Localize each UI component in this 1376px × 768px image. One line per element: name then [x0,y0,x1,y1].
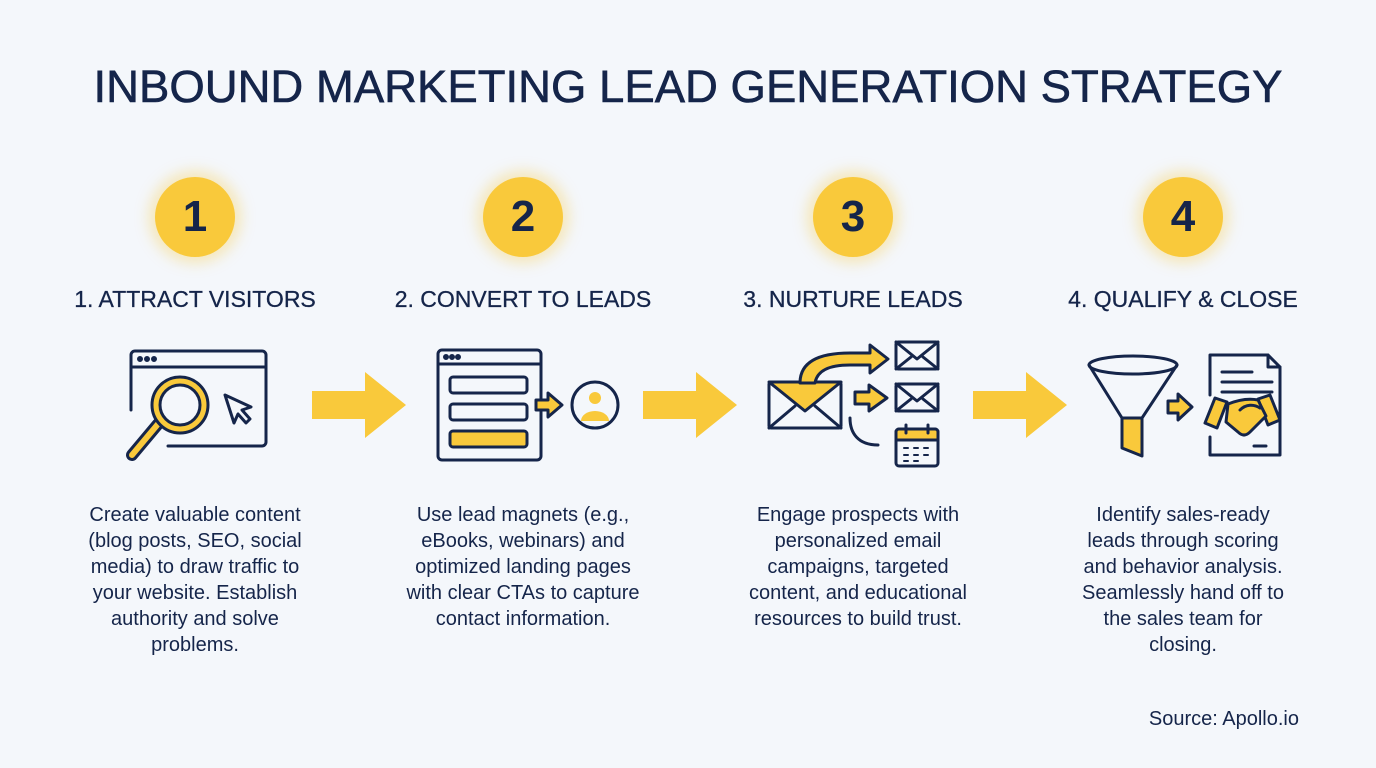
icon: browser search [131,351,266,455]
step 2 badge: 2 [511,192,535,241]
step 4 badge [1143,177,1223,257]
description 1: media) to draw traffic to [91,556,299,578]
arrow 2 [643,372,737,438]
description 2: with clear CTAs to capture [406,582,640,604]
heading 4: 4. QUALIFY & CLOSE [1068,286,1298,312]
description 1: Create valuable content [89,504,301,526]
description 1: problems. [151,634,239,656]
description 4: closing. [1149,634,1217,656]
description 2: eBooks, webinars) and [421,530,625,552]
description 4: Identify sales-ready [1096,504,1270,526]
icon: funnel and deal [1089,355,1280,456]
description 3 [749,504,967,630]
description 1: your website. Establish [93,582,297,604]
heading 3: 3. NURTURE LEADS [743,286,963,312]
description 3: content, and educational [749,582,967,604]
description 1: (blog posts, SEO, social [88,530,302,552]
description 2: contact information. [436,608,610,630]
description 1 [88,504,302,656]
description 4: and behavior analysis. [1083,556,1282,578]
icon: email nurture [769,342,938,466]
description 4: leads through scoring [1087,530,1279,552]
arrow 3 [973,372,1067,438]
description 4 [1082,504,1284,656]
step 3 badge: 3 [841,192,865,241]
description 3: resources to build trust. [754,608,962,630]
description 2: optimized landing pages [415,556,631,578]
arrow 1 [312,372,406,438]
description 3: campaigns, targeted [767,556,949,578]
source: Source: Apollo.io [1149,708,1299,730]
heading 1: 1. ATTRACT VISITORS [74,286,316,312]
step 2 badge [483,177,563,257]
description 2 [406,504,640,630]
step 4 badge: 4 [1171,192,1195,241]
step 1 badge: 1 [183,192,207,241]
step 1 badge [155,177,235,257]
heading 2: 2. CONVERT TO LEADS [395,286,651,312]
description 4: the sales team for [1104,608,1262,630]
title: INBOUND MARKETING LEAD GENERATION STRATEGY [93,61,1283,112]
description 2: Use lead magnets (e.g., [417,504,629,526]
step 3 badge [813,177,893,257]
description 3: personalized email [775,530,941,552]
description 3: Engage prospects with [757,504,959,526]
icon: landing page form [438,350,618,460]
description 4: Seamlessly hand off to [1082,582,1284,604]
description 1: authority and solve [111,608,279,630]
